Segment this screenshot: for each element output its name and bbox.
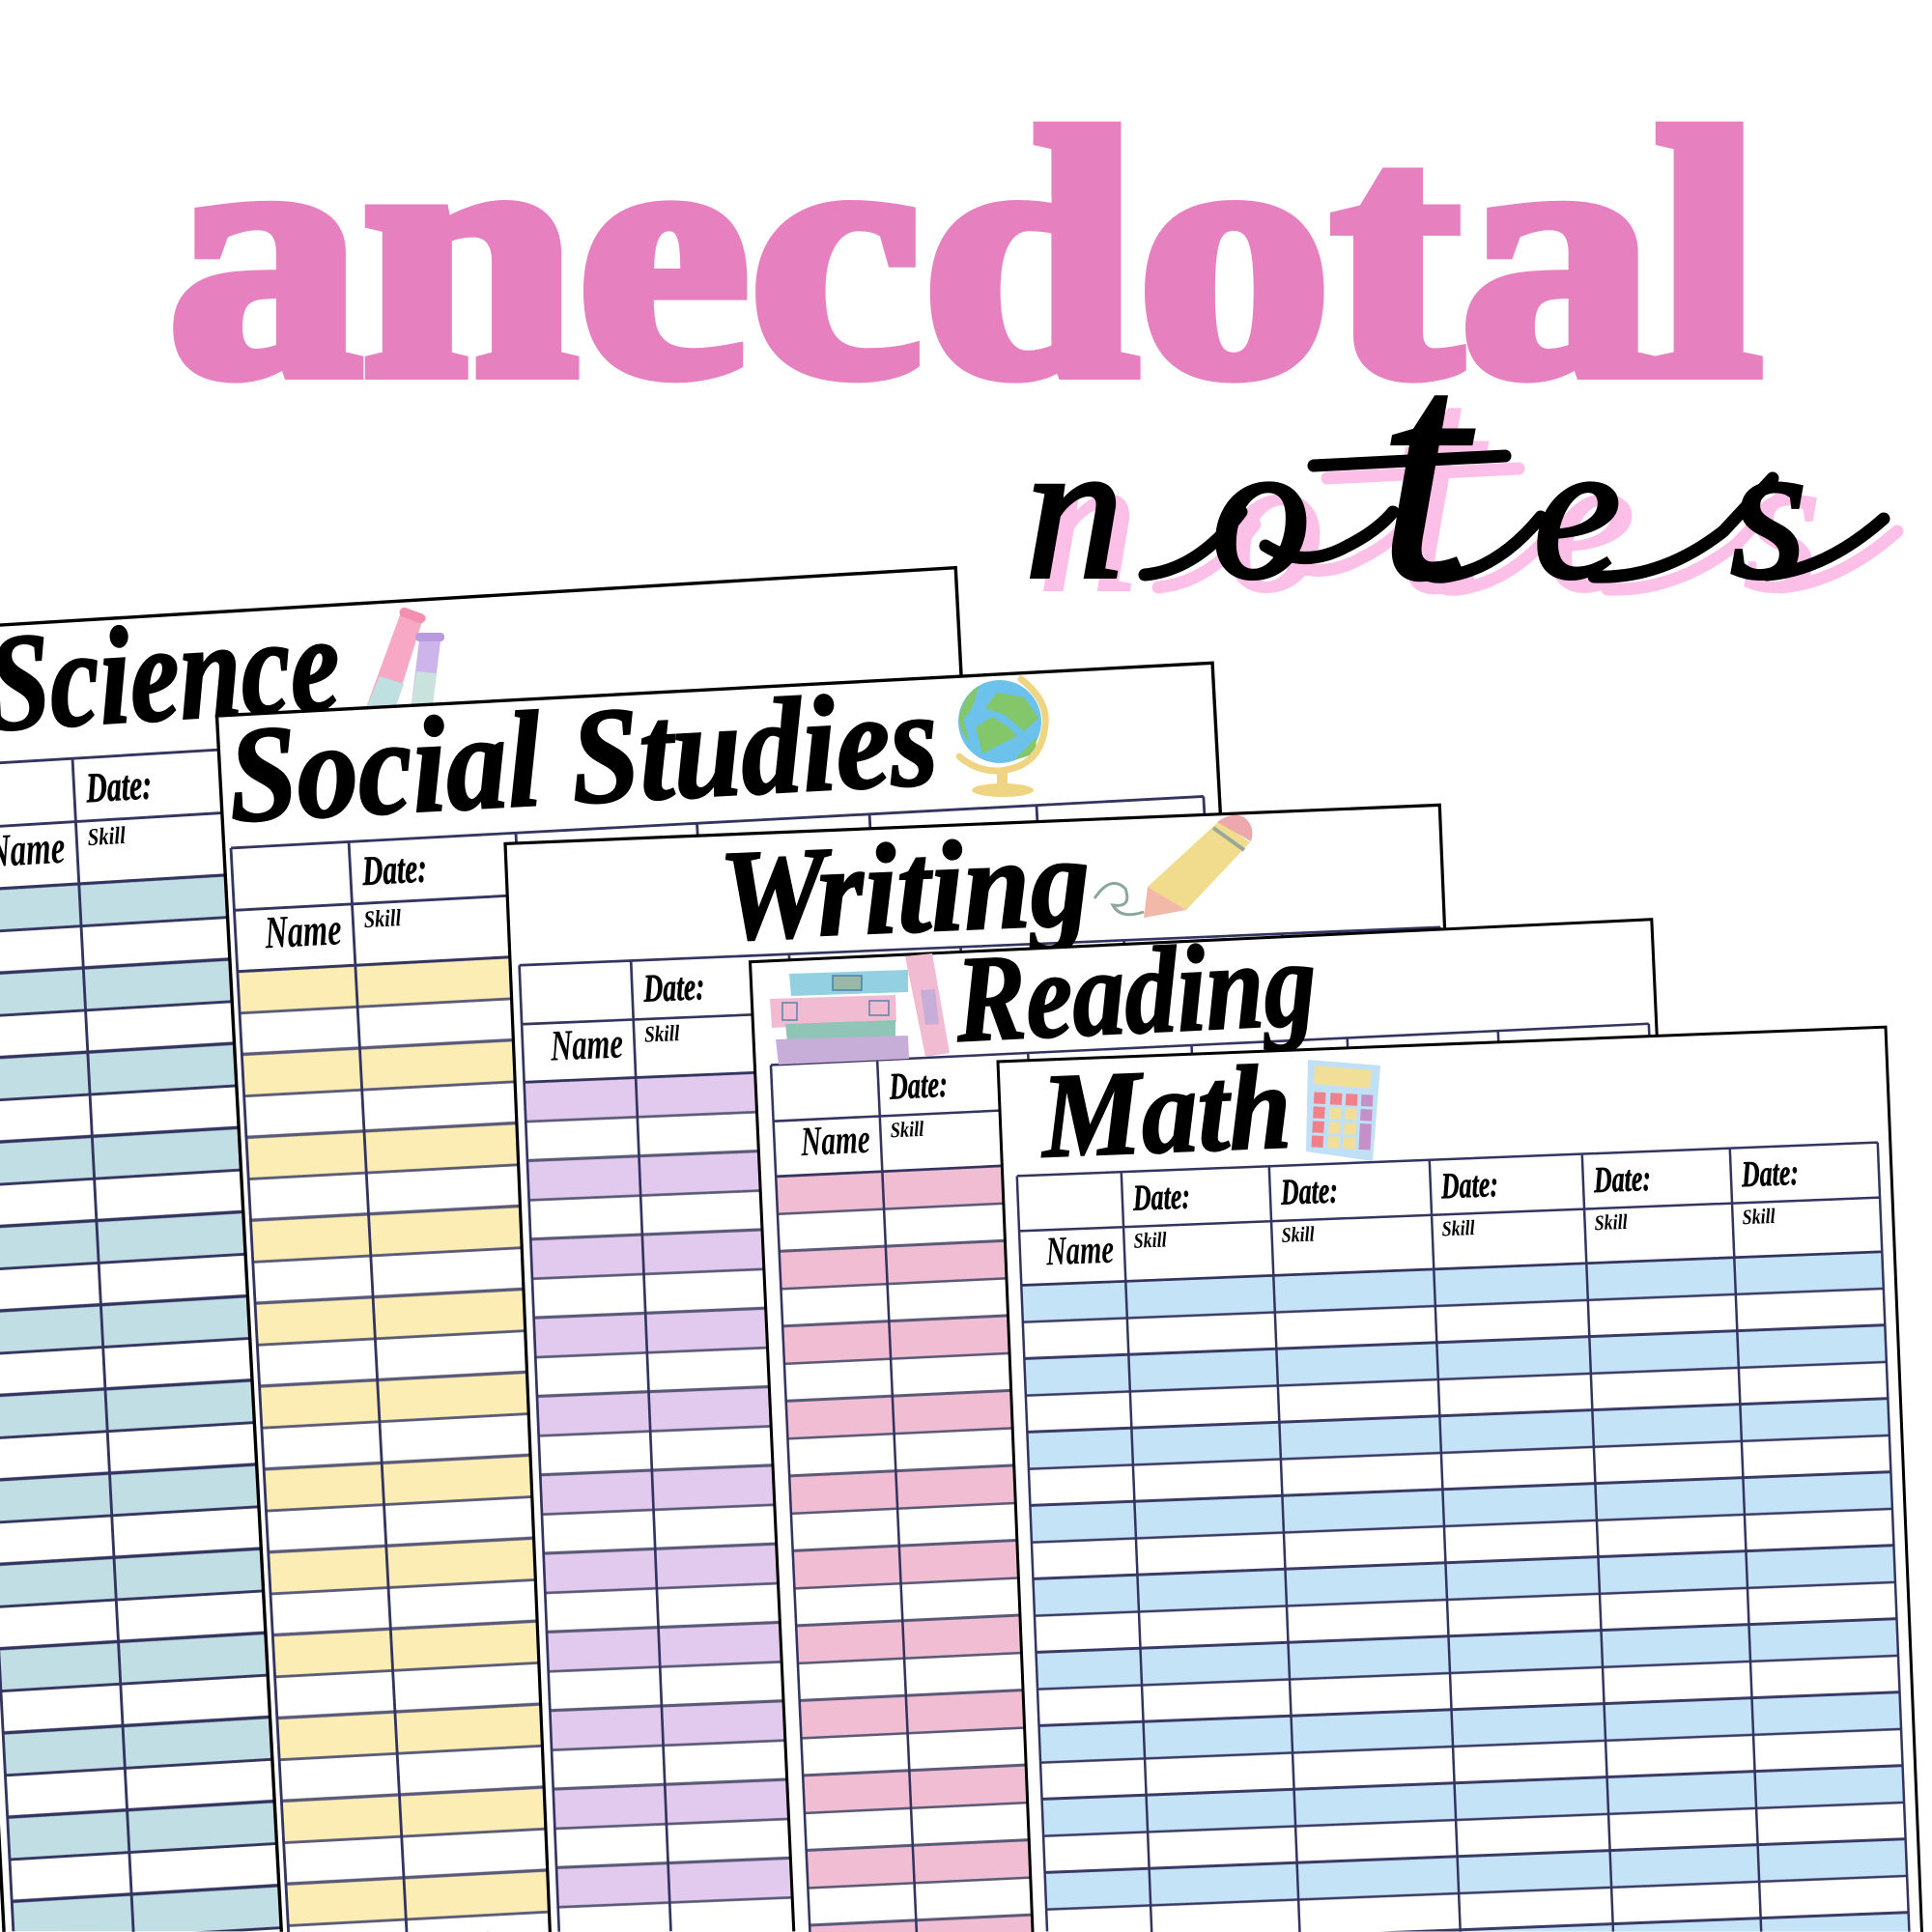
column labels: dates and skills: Skill [1281,1222,1316,1247]
reading table [771,1024,1690,1932]
column label: name: Name [1044,1228,1115,1274]
panel: science sheet [0,550,1027,1932]
writing heading: Writing [717,810,1093,967]
science table: Date: [84,761,153,811]
icon: books [770,953,950,1065]
column labels: dates and skills: Date: [1279,1171,1339,1213]
math heading: Math [1037,1040,1293,1183]
panel: math sheet [998,1017,1921,1932]
column labels: dates and skills: Skill [1441,1215,1476,1240]
writing table [520,927,1482,1932]
column labels: dates and skills [1131,1152,1801,1253]
icon: pencil [1094,815,1252,918]
column labels: dates and skills: Skill [1133,1227,1168,1253]
social studies table [231,796,1264,1932]
math sheet background [998,1027,1921,1932]
reading sheet background [750,920,1697,1932]
panel: reading sheet [750,898,1697,1932]
science sheet background [0,568,1027,1932]
social studies sheet background [216,663,1280,1932]
math table [1017,1143,1909,1932]
reading sheet border [750,920,1697,1932]
panel: social studies sheet [216,647,1280,1932]
column labels: dates and skills: Skill [1594,1209,1629,1235]
reading table: Skill [890,1117,924,1142]
math sheet border [998,1027,1921,1932]
title: anecdotal: anecdotal [168,59,1762,449]
column labels: dates and skills: Date: [1592,1158,1652,1201]
reading table: Name [799,1117,871,1165]
icon: globe [958,679,1045,797]
social studies table: Name [263,904,343,958]
writing table: Date: [642,964,705,1010]
column labels: dates and skills: Date: [1740,1152,1800,1195]
icon: test tubes [365,607,444,720]
table grid [1017,1143,1909,1932]
science sheet border [0,568,1027,1932]
panel: writing sheet [505,795,1486,1932]
writing table: Name [549,1019,624,1070]
science table: Skill [87,822,127,851]
science table [0,706,1004,1932]
column labels: dates and skills: Date: [1439,1164,1499,1207]
subtitle: notes: not es [1025,294,1807,646]
column labels: dates and skills: Skill [1742,1204,1776,1229]
reading table: Date: [888,1064,949,1108]
social studies table: Skill [363,905,402,933]
subtitle shadow: notes: not es [1038,306,1821,659]
writing sheet border [505,805,1486,1932]
social studies sheet border [216,663,1280,1932]
writing table: Skill [644,1021,680,1048]
table rows [1021,1252,1909,1932]
reading heading: Reading [952,914,1319,1068]
social studies heading: Social Studies [225,662,941,851]
icon: calculator [1306,1060,1380,1161]
writing sheet background [505,805,1486,1932]
column labels: dates and skills: Date: [1131,1176,1191,1219]
social studies table: Date: [360,845,428,895]
